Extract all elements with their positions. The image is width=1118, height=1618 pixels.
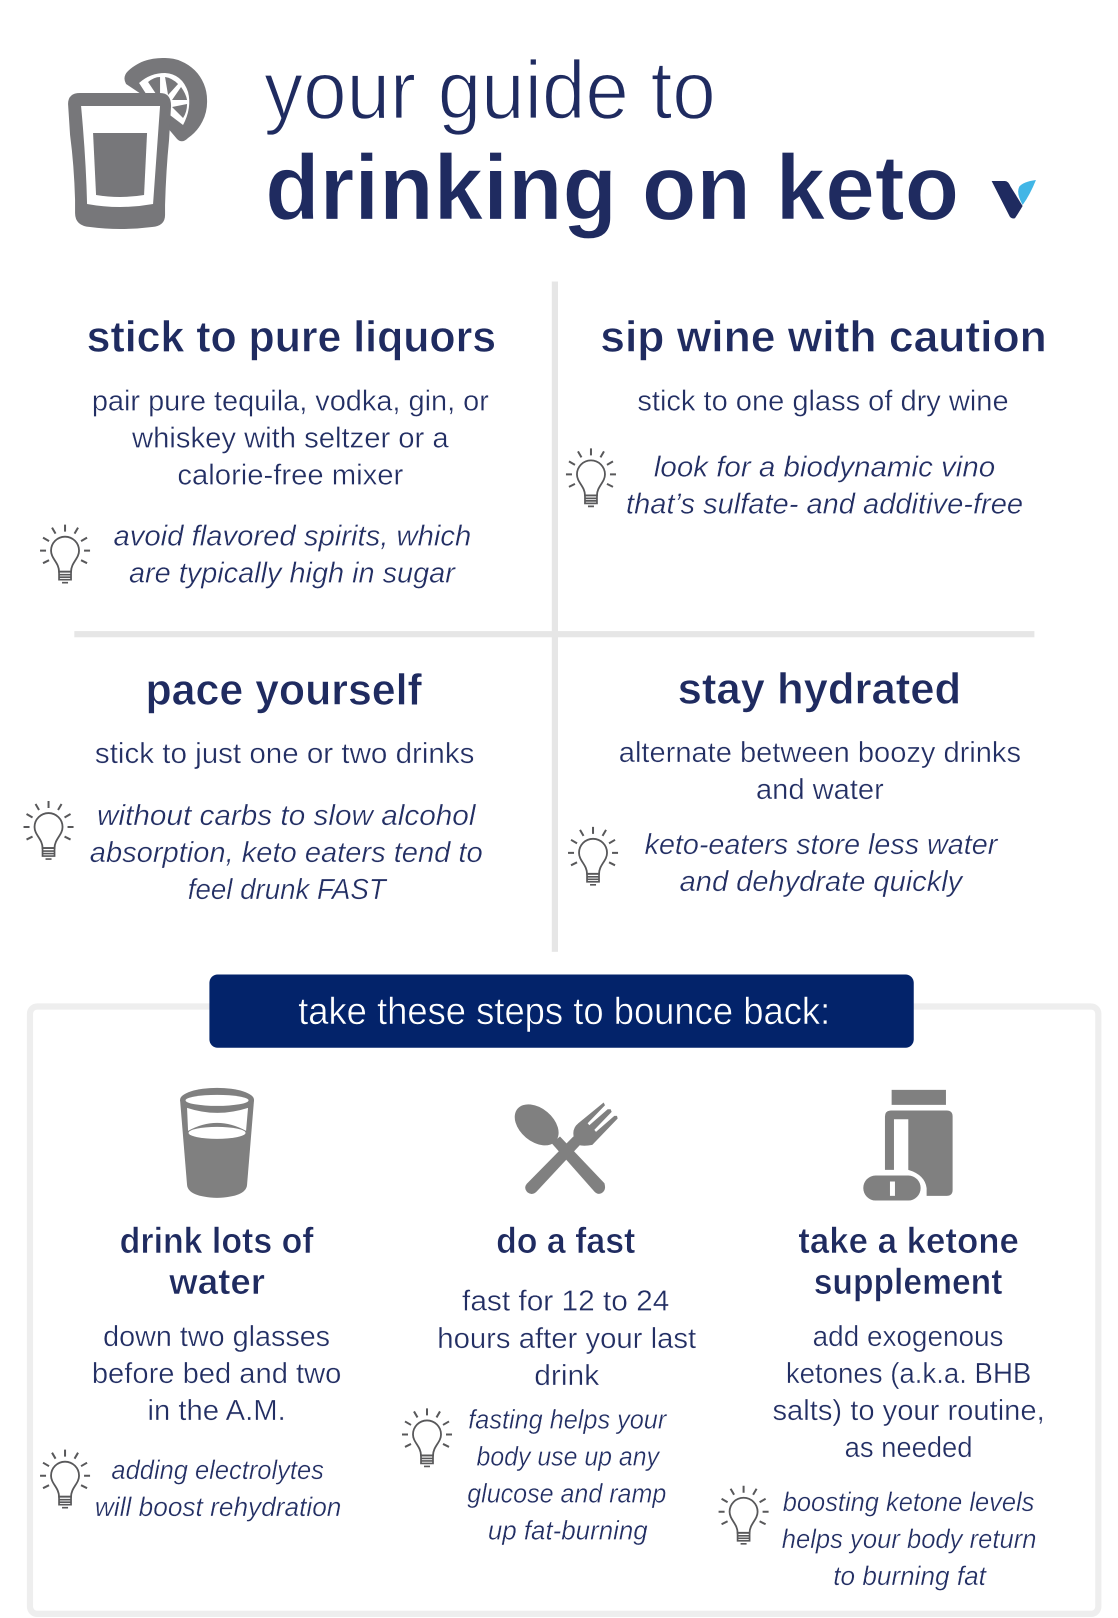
icon: spoon and fork	[507, 1096, 618, 1194]
title: drinking on keto	[265, 136, 959, 240]
panel: pace yourself: pace yourself	[145, 666, 422, 714]
icon: water glass	[180, 1088, 254, 1198]
icon: supplement bottle and pill	[863, 1090, 953, 1201]
column: take a ketone supplement: salts) to your routine,	[772, 1395, 1045, 1427]
icon: cocktail glass with citrus slice	[68, 58, 207, 229]
column: do a fast: hours after your last	[437, 1323, 696, 1355]
column: drink lots of water: adding electrolytes	[111, 1455, 324, 1485]
panel: pace yourself: without carbs to slow alcohol	[97, 800, 477, 832]
title: your guide to	[264, 45, 716, 137]
column: do a fast: glucose and ramp	[467, 1479, 666, 1509]
panel: sip wine with caution: sip wine with caution	[600, 314, 1047, 362]
panel: pace yourself	[24, 666, 483, 906]
panel: sip wine with caution: that’s sulfate- and additive-free	[626, 489, 1023, 521]
panel: stay hydrated	[568, 665, 1021, 898]
column: take a ketone supplement: ketones (a.k.a. BHB	[786, 1358, 1031, 1390]
panel: stay hydrated: alternate between boozy drinks	[619, 737, 1021, 769]
panel: sip wine with caution: stick to one glass of dry wine	[637, 385, 1009, 417]
column: take a ketone supplement: add exogenous	[813, 1321, 1003, 1353]
panel: stay hydrated: and dehydrate quickly	[680, 866, 964, 898]
column: do a fast	[402, 1220, 696, 1546]
logo: v mark	[992, 180, 1036, 218]
panel: stick to pure liquors: whiskey with seltzer or a	[131, 423, 450, 455]
column: drink lots of water: water	[168, 1261, 265, 1302]
dividers	[74, 282, 1034, 952]
panel: stick to pure liquors: stick to pure liquors	[87, 314, 496, 362]
panel: stick to pure liquors: avoid flavored spirits, which	[114, 521, 471, 553]
panel: sip wine with caution	[566, 314, 1047, 521]
panel: pace yourself: stick to just one or two drinks	[95, 738, 474, 770]
column: drink lots of water	[40, 1220, 341, 1522]
banner: take these steps to bounce back:	[298, 990, 830, 1033]
panel: stick to pure liquors: calorie-free mixer	[177, 460, 404, 492]
panel: stick to pure liquors	[40, 314, 496, 590]
column: drink lots of water: will boost rehydration	[95, 1492, 341, 1522]
column: take a ketone supplement: as needed	[845, 1432, 973, 1464]
title	[264, 45, 959, 240]
column: do a fast: drink	[534, 1360, 600, 1392]
panel: stay hydrated: and water	[756, 774, 884, 806]
column: take a ketone supplement: to burning fat	[833, 1561, 987, 1591]
column: take a ketone supplement: boosting ketone levels	[783, 1487, 1034, 1517]
panel: pace yourself: absorption, keto eaters tend to	[90, 837, 483, 869]
column: do a fast: fasting helps your	[468, 1404, 667, 1434]
column: take a ketone supplement: supplement	[814, 1261, 1002, 1302]
column: do a fast: do a fast	[496, 1220, 635, 1261]
panel: stay hydrated: keto-eaters store less water	[645, 829, 999, 861]
column: do a fast: fast for 12 to 24	[462, 1286, 669, 1318]
column: take a ketone supplement: take a ketone	[798, 1220, 1019, 1261]
column: drink lots of water: down two glasses	[103, 1321, 330, 1353]
banner	[209, 975, 914, 1048]
panel: stay hydrated: stay hydrated	[678, 665, 961, 713]
panel: sip wine with caution: look for a biodynamic vino	[654, 451, 995, 483]
panel: pace yourself: feel drunk FAST	[188, 874, 388, 906]
column: take a ketone supplement	[719, 1220, 1045, 1591]
column: do a fast: up fat-burning	[488, 1516, 648, 1546]
column: drink lots of water: in the A.M.	[148, 1395, 286, 1427]
column: drink lots of water: before bed and two	[92, 1358, 341, 1390]
column: do a fast: body use up any	[477, 1441, 661, 1471]
panel: bounce back box	[30, 1006, 1098, 1614]
column: take a ketone supplement: helps your body return	[782, 1524, 1036, 1554]
panel: stick to pure liquors: are typically high in sugar	[129, 558, 456, 590]
column: drink lots of water: drink lots of	[120, 1220, 314, 1261]
panel: stick to pure liquors: pair pure tequila, vodka, gin, or	[92, 385, 489, 417]
